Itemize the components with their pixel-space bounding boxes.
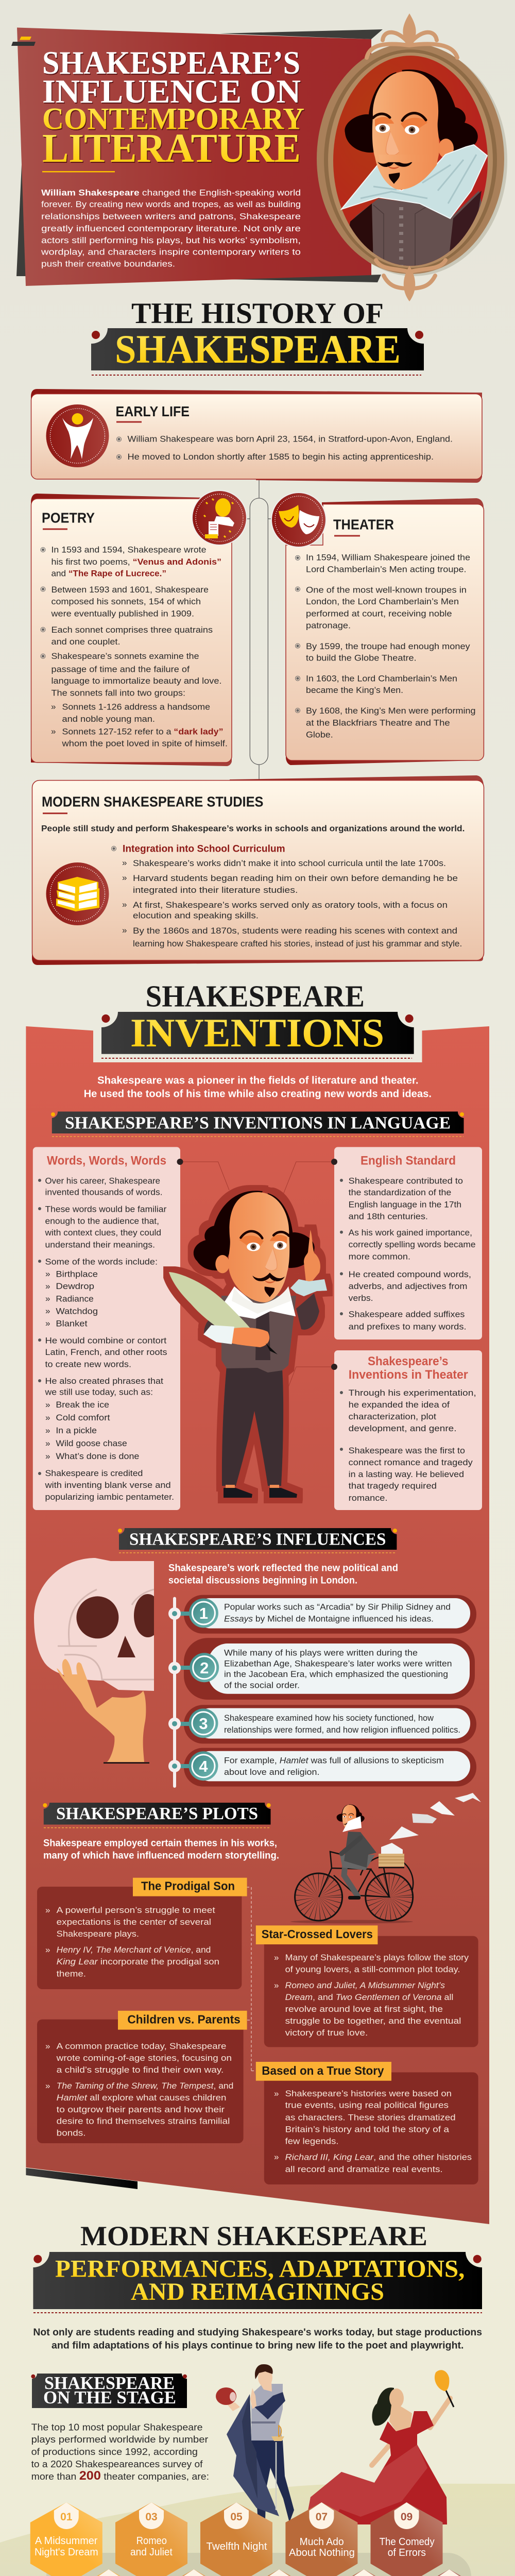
text block: composed his sonnets, 154 of which (52, 597, 201, 606)
hexagon 07: Much Ado (300, 2536, 344, 2548)
text block (296, 553, 476, 739)
callout lines (180, 1162, 334, 1394)
text block: that tragedy required (349, 1481, 437, 1491)
text block: to create new words. (45, 1359, 131, 1369)
text block: elocution and speaking skills. (133, 911, 259, 921)
text block: Shakespeare’s histories were based on (285, 2089, 452, 2098)
item 2: 2 (200, 1659, 209, 1677)
intro text: Not only are students reading and studying Shakespeare's works today, but stage productions (33, 2327, 482, 2338)
text block: These words would be familiar (45, 1205, 167, 1214)
text block: desire to find themselves strains familial (57, 2116, 230, 2126)
panel: based on a true story (256, 2062, 478, 2184)
text block: to outgrow their parents and how their (57, 2105, 225, 2114)
text block: Over his career, Shakespeare (45, 1176, 160, 1185)
panel: children vs. parents (37, 2011, 247, 2143)
text block: characterization, plot (349, 1412, 436, 1421)
heading: MODERN SHAKESPEARE STUDIES (42, 794, 264, 810)
icon: person (46, 404, 109, 467)
item 2: in the Jacobean Era, which emphasized the questioning (224, 1670, 448, 1679)
text block: bonds. (57, 2128, 85, 2138)
item 3: 3 (199, 1715, 208, 1733)
plaque: Shakespeare on the stage: SHAKESPEARE (44, 2373, 175, 2393)
text block (31, 2421, 209, 2483)
text block (340, 1176, 476, 1331)
text block: » (45, 1905, 50, 1915)
text block: » (51, 726, 56, 736)
item 3: relationships were formed, and how religion influenced politics. (224, 1725, 460, 1735)
text block: and one couplet. (52, 637, 121, 647)
text block: at the Blackfriars Theatre and The (306, 718, 450, 727)
text block: became the King’s Men. (306, 685, 403, 695)
item 4: about love and religion. (224, 1768, 319, 1777)
text block: » (45, 1281, 50, 1291)
plaque: plots: SHAKESPEARE’S PLOTS (56, 1804, 258, 1823)
panel: English standard (331, 1147, 482, 1340)
text block: theme. (57, 1969, 86, 1978)
text block: Birthplace (56, 1269, 98, 1279)
text block: At first, Shakespeare’s works served only as oratory tools, with a focus on (133, 900, 448, 910)
heading: Inventions in Theater (349, 1368, 468, 1382)
text block: victory of true love. (285, 2028, 368, 2038)
text block: Latin, French, and other roots (45, 1347, 167, 1357)
text block: Dream, and Two Gentlemen of Verona all (285, 1992, 453, 2002)
heading: the history of: THE HISTORY OF (131, 297, 384, 330)
item 2: Elizabethan Age, Shakespeare’s later works were written (224, 1659, 452, 1669)
hexagon 06 (243, 2569, 315, 2576)
text block: Cold comfort (56, 1413, 110, 1422)
icon: poet (192, 490, 247, 546)
text block: to build the Globe Theatre. (306, 653, 417, 663)
text block: » (122, 858, 127, 868)
plaque: Shakespeare: SHAKESPEARE (115, 327, 401, 371)
panel: words, words, words (33, 1147, 183, 1510)
hexagon 09: of Errors (388, 2547, 426, 2558)
text block: a child’s struggle to find their own way. (57, 2065, 224, 2075)
text block: London, the Lord Chamberlain’s Men (306, 597, 459, 606)
text block: Watchdog (56, 1306, 98, 1316)
hexagon 09: 09 (401, 2511, 413, 2523)
hexagon 05 (200, 2502, 272, 2576)
text block (41, 824, 465, 948)
text block: » (45, 1294, 50, 1303)
text block: Break the ice (56, 1400, 109, 1410)
panel: Shakespeare's inventions red section (26, 1026, 489, 2224)
text block: enough to the audience that, (45, 1216, 159, 1226)
title: CONTEMPORARY (42, 102, 304, 136)
text block: Shakespeare added suffixes (349, 1310, 465, 1319)
text block: Shakespeare’s works didn’t make it into school curricula until the late 1700s. (133, 858, 446, 868)
illustration: Shakespeare on a bicycle (290, 1793, 481, 1924)
heading (349, 1354, 468, 1382)
text block: Sonnets 1-126 address a handsome (62, 702, 210, 712)
hexagon 07: 07 (316, 2511, 328, 2523)
text block: William Shakespeare was born April 23, 1564, in Stratford-upon-Avon, England. (128, 434, 453, 444)
item 1: Popular works such as “Arcadia” by Sir Philip Sidney and (224, 1602, 451, 1612)
item 2 (168, 1638, 475, 1700)
text block: » (274, 1953, 279, 1962)
icon: theater masks (271, 492, 327, 548)
text block: » (122, 873, 127, 883)
text block: learning how Shakespeare crafted his stories, instead of just his grammar and style. (133, 939, 462, 948)
text block: » (45, 1451, 50, 1461)
intro text: Shakespeare employed certain themes in his works, (43, 1837, 277, 1849)
text block: Shakespeare plays. (57, 1929, 139, 1939)
intro paragraph (41, 188, 301, 269)
text block: People still study and perform Shakespeare’s works in schools and organizations around the world. (41, 824, 465, 834)
text block: in a lasting way. He believed (349, 1469, 464, 1479)
timeline connector (246, 480, 272, 779)
hexagons: top 10 plays (30, 2502, 485, 2576)
heading: modern Shakespeare: MODERN SHAKESPEARE (80, 2221, 427, 2251)
heading: Shakespeare: SHAKESPEARE (145, 979, 365, 1013)
intro text (84, 1075, 432, 1099)
heading: Words, Words, Words (47, 1154, 166, 1168)
band behind hexagons (46, 2553, 471, 2576)
text block: What’s done is done (56, 1451, 139, 1461)
text block: Shakespeare is credited (45, 1468, 143, 1478)
hexagon 03: and Juliet (130, 2547, 173, 2558)
intro paragraph: William Shakespeare changed the English-speaking world (41, 188, 301, 198)
text block: The sonnets fall into two groups: (52, 688, 185, 698)
intro paragraph: greatly influenced contemporary literature. Not only are (41, 224, 301, 233)
plaque: performances, adaptations, and reimaginings: PERFORMANCES, ADAPTATIONS, (55, 2255, 465, 2282)
intro paragraph: actors still performing his plays, but his works’ symbolism, (41, 235, 301, 245)
text block: Wild goose chase (56, 1438, 127, 1448)
heading: EARLY LIFE (115, 403, 190, 419)
intro text: Shakespeare’s work reflected the new political and (168, 1563, 398, 1574)
text block: » (122, 925, 127, 935)
text block: struggle to be together, and the eventual (285, 2016, 461, 2026)
text block: romance. (349, 1493, 387, 1503)
hexagon 03 (115, 2502, 187, 2576)
text block: » (45, 2041, 50, 2051)
text block: In a pickle (56, 1426, 97, 1435)
intro paragraph: wordplay, and characters inspire contemporary writers to (41, 247, 301, 257)
text block: Romeo and Juliet, A Midsummer Night’s (285, 1980, 445, 1990)
text block: He also created phrases that (45, 1376, 163, 1386)
plaque: performances, adaptations, and reimaginings: AND REIMAGININGS (131, 2278, 384, 2306)
panel: modern Shakespeare studies (32, 775, 484, 965)
text block: » (45, 2081, 50, 2091)
text block: his first two poems, “Venus and Adonis” (52, 557, 221, 567)
panel: star-crossed lovers (256, 1925, 478, 2047)
text block: patronage. (306, 620, 351, 630)
text block (274, 1953, 469, 2038)
text block: In 1594, William Shakespeare joined the (306, 553, 470, 563)
hexagon 04 (158, 2569, 230, 2576)
item 2: of the social order. (224, 1681, 300, 1690)
hexagon 08 (328, 2569, 400, 2576)
hexagon 10 (413, 2569, 485, 2576)
text block: As his work gained importance, (349, 1228, 472, 1238)
item 1: 1 (199, 1604, 208, 1622)
text block: Globe. (306, 730, 333, 739)
text block: The Taming of the Shrew, The Tempest , and (57, 2081, 233, 2091)
intro paragraph: forever. By creating new words and tropes, as well as building (41, 199, 301, 209)
text block: King Lear incorporate the prodigal son (57, 1957, 219, 1967)
hexagon 01: A Midsummer (35, 2535, 98, 2547)
hexagon 07: About Nothing (289, 2547, 355, 2558)
text block: development, and genre. (349, 1423, 456, 1433)
item 4: For example, Hamlet was full of allusions to skepticism (224, 1756, 444, 1765)
black ribbon tab (26, 2168, 138, 2189)
item 1: Essays by Michel de Montaigne influenced his ideas. (224, 1615, 434, 1624)
text block: and “The Rape of Lucrece.” (52, 569, 166, 579)
text block: » (45, 1945, 50, 1955)
text block: invented thousands of words. (45, 1187, 163, 1197)
hills background (0, 2484, 515, 2576)
text block (340, 1388, 476, 1503)
text block: Britain’s history and told the story of a (285, 2125, 450, 2134)
text block: to a 2020 Shakespeareances survey of (31, 2459, 203, 2469)
text block (274, 2089, 472, 2174)
hexagon 01: 01 (60, 2511, 73, 2523)
text block: the standardization of the (349, 1188, 451, 1197)
plaque: Shakespeare on the stage: ON THE STAGE (43, 2387, 176, 2408)
intro text: Shakespeare was a pioneer in the fields of literature and theater. (97, 1075, 418, 1087)
text block: more than 200 theater companies, are: (31, 2469, 209, 2483)
text block: He would combine or contort (45, 1335, 167, 1345)
text block (41, 545, 228, 748)
plaque: Shakespeare on the stage (31, 2373, 187, 2408)
title: SHAKESPEARE’S (42, 45, 300, 81)
text block: more common. (349, 1251, 410, 1261)
heading: English Standard (360, 1154, 456, 1168)
text block: as characters. These stories dramatized (285, 2112, 456, 2122)
hexagon 09 (371, 2502, 443, 2576)
panel: poetry (31, 490, 247, 766)
text block: verbs. (349, 1293, 373, 1303)
text block: » (274, 2152, 279, 2162)
text block: In 1603, the Lord Chamberlain’s Men (306, 673, 457, 683)
text block: we still use today, such as: (44, 1387, 153, 1397)
text block: Henry IV, The Merchant of Venice , and (57, 1945, 211, 1955)
text block (116, 434, 453, 462)
text block: revolve around love at first sight, the (285, 2004, 443, 2014)
panel: early life (31, 389, 482, 483)
text block: performed at court, receiving noble (306, 609, 452, 618)
text block: with inventing blank verse and (44, 1480, 171, 1490)
intro text: and film adaptations of his plays continue to bring new life to the poet and playwright. (52, 2340, 464, 2351)
plaque: performances, adaptations, and reimaginings (33, 2252, 482, 2313)
text block: Shakespeare contributed to (349, 1176, 463, 1185)
text block: In 1593 and 1594, Shakespeare wrote (52, 545, 206, 554)
hexagon 09: The Comedy (380, 2536, 435, 2548)
intro paragraph: push their creative boundaries. (41, 259, 175, 269)
panel: children vs. parents: Children vs. Parents (127, 2012, 241, 2026)
text block: of young lovers, a still-common plot today. (285, 1964, 460, 1974)
intro text (43, 1837, 279, 1861)
item 2: While many of his plays were written during the (224, 1649, 418, 1658)
intro text (33, 2327, 482, 2351)
text block (45, 1905, 219, 1978)
hexagon 07 (285, 2502, 357, 2576)
text block: Dewdrop (56, 1281, 94, 1291)
intro text: He used the tools of his time while also creating new words and ideas. (84, 1088, 432, 1099)
item 4 (168, 1748, 476, 1787)
text block: By 1599, the troupe had enough money (306, 641, 470, 651)
plaque: influences: SHAKESPEARE’S INFLUENCES (129, 1530, 386, 1549)
text block: few legends. (285, 2136, 339, 2146)
text block: with context clues, they could (44, 1228, 161, 1238)
text block: A powerful person’s struggle to meet (57, 1905, 215, 1915)
text block: understand their meanings. (45, 1240, 155, 1249)
timeline: influences (168, 1595, 476, 1787)
text block: Some of the words include: (45, 1257, 158, 1266)
text block: Lord Chamberlain’s Men acting troupe. (306, 564, 467, 574)
text block: Radiance (56, 1294, 94, 1303)
text block: He created compound words, (349, 1269, 471, 1279)
plaque: inventions in language: SHAKESPEARE’S INVENTIONS IN LANGUAGE (65, 1114, 451, 1132)
illustration: actress with mask (305, 2370, 454, 2524)
text block: were eventually published in 1909. (50, 609, 194, 618)
text block: and prefixes to many words. (349, 1321, 467, 1331)
text block: Between 1593 and 1601, Shakespeare (52, 585, 209, 595)
text block: Shakespeare was the first to (349, 1446, 465, 1455)
intro text (168, 1563, 398, 1586)
text block: One of the most well-known troupes in (306, 585, 467, 595)
illustration: hand holding skull (34, 1558, 162, 1764)
dashed connector (247, 1887, 256, 2071)
text block: true events, using real political figures (285, 2100, 449, 2110)
text block: he expanded the idea of (349, 1400, 450, 1410)
text block: Integration into School Curriculum (123, 843, 285, 854)
text block: A common practice today, Shakespeare (57, 2041, 226, 2051)
intro text: many of which have influenced modern storytelling. (43, 1850, 279, 1861)
text block: » (45, 1306, 50, 1316)
text block: correctly spelling words became (349, 1240, 476, 1249)
text block: integrated into their literature studies. (133, 885, 298, 895)
text block: Blanket (56, 1319, 88, 1329)
text block: whom the poet loved in spite of himself. (61, 739, 228, 748)
hexagon 05: 05 (230, 2511, 243, 2523)
hexagon 03: 03 (145, 2511, 158, 2523)
icon: books (46, 862, 109, 925)
heading: POETRY (42, 510, 95, 526)
text block: of productions since 1992, according (31, 2446, 198, 2457)
text block: He moved to London shortly after 1585 to begin his acting apprenticeship. (128, 452, 434, 462)
text block: By 1608, the King’s Men were performing (306, 706, 476, 716)
hexagon 01: Night's Dream (35, 2547, 98, 2558)
item 1 (168, 1595, 476, 1634)
illustration: Shakespeare with quill (169, 1191, 327, 1498)
text block: The top 10 most popular Shakespeare (31, 2421, 202, 2433)
panel: based on a true story: Based on a True Story (262, 2064, 384, 2077)
text block: Harvard students began reading him on their own before demanding he be (133, 873, 458, 883)
panel: the prodigal son: The Prodigal Son (141, 1879, 235, 1892)
text block: » (45, 1269, 50, 1279)
illustration: Hamlet actor with skull (216, 2364, 294, 2522)
text block: » (51, 702, 56, 711)
text block: Each sonnet comprises three quatrains (52, 625, 213, 635)
text block: connect romance and tragedy (349, 1458, 473, 1467)
text block: » (45, 1400, 50, 1410)
text block: plays performed worldwide by number (31, 2434, 208, 2445)
panel: star-crossed lovers: Star-Crossed Lovers (262, 1927, 373, 1941)
panel: inventions in theater (331, 1350, 482, 1510)
title: LITERATURE (42, 126, 301, 171)
text block: passage of time and the failure of (52, 665, 190, 674)
text block: expectations is the center of several (57, 1917, 211, 1927)
intro paragraph: relationships between writers and patrons, Shakespeare (41, 211, 301, 222)
panel: the prodigal son (37, 1878, 247, 1989)
text block: » (45, 1426, 50, 1435)
heading: Shakespeare’s (368, 1354, 448, 1368)
panel: theater (271, 492, 484, 765)
hexagon 05: Twelfth Night (206, 2541, 267, 2552)
title: INFLUENCE ON (42, 73, 301, 110)
text block: and 18th centuries. (349, 1211, 428, 1221)
text block: By the 1860s and 1870s, students were reading his scenes with context and (133, 926, 457, 936)
text block: Richard III, King Lear , and the other histories (285, 2153, 472, 2162)
text block: Shakespeare’s sonnets examine the (52, 651, 199, 661)
text block: » (45, 1318, 50, 1328)
text block: Many of Shakespeare’s plays follow the story (285, 1953, 469, 1962)
hexagon 03: Romeo (136, 2535, 167, 2547)
text block: » (45, 1438, 50, 1448)
intro text: societal discussions beginning in London. (168, 1574, 357, 1586)
text block: popularizing iambic pentameter. (45, 1492, 174, 1502)
text block: Through his experimentation, (349, 1388, 476, 1398)
item 3: Shakespeare examined how his society functioned, how (224, 1714, 434, 1723)
text block: » (122, 900, 127, 909)
portrait: Shakespeare in oval frame (317, 13, 507, 301)
text block: adverbs, and adjectives from (349, 1281, 468, 1291)
text block: Hamlet all explore what causes children (57, 2093, 226, 2103)
item 3 (168, 1705, 476, 1743)
text block (38, 1176, 174, 1502)
text block: » (45, 1413, 50, 1422)
text block: all record and dramatize real events. (285, 2164, 443, 2174)
text block: Sonnets 127-152 refer to a “dark lady” (62, 727, 224, 737)
heading: THEATER (333, 517, 394, 533)
text block: English language in the 17th (349, 1199, 461, 1210)
text block: language to immortalize beauty and love. (52, 676, 222, 686)
panel: hero (11, 28, 383, 286)
item 4: 4 (199, 1757, 208, 1775)
text block: » (274, 1980, 279, 1990)
plaque: inventions: INVENTIONS (130, 1010, 384, 1055)
hexagon 02 (73, 2569, 145, 2576)
hexagon 01 (30, 2502, 102, 2576)
text block: wrote coming-of-age stories, focusing on (56, 2053, 232, 2063)
text block: and noble young man. (62, 714, 155, 724)
text block: » (274, 2089, 279, 2098)
text block (45, 2041, 233, 2138)
title (42, 45, 304, 171)
plaque: plots (43, 1803, 271, 1828)
